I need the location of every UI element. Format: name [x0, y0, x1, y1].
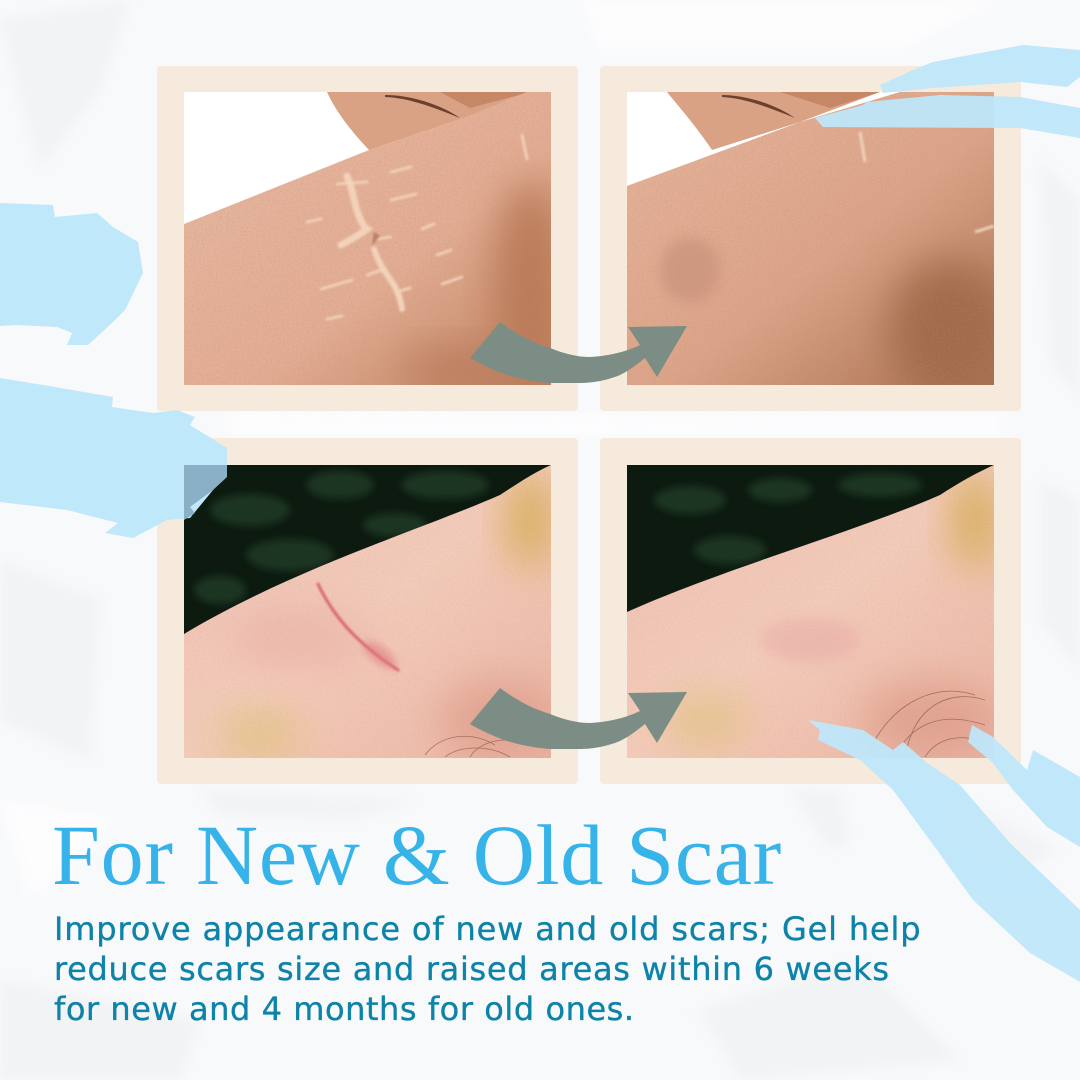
photo: old scar before [184, 92, 564, 400]
photo: new scar after [627, 465, 1000, 760]
panel: bottom right frame [600, 438, 1021, 784]
description text: for new and 4 months for old ones. [54, 990, 635, 1028]
brush overlap on photo [184, 465, 227, 520]
panel: top right frame [600, 66, 1021, 411]
arrow: top before to after [470, 322, 687, 383]
panel: top left frame [157, 66, 578, 411]
brush stroke: left lower [0, 378, 227, 538]
description text [54, 910, 921, 1028]
panel: bottom left frame [157, 438, 578, 784]
photo: new scar before [184, 465, 560, 761]
description text: Improve appearance of new and old scars; Gel help [54, 910, 921, 948]
brush stroke: left upper [0, 203, 143, 345]
photo: old scar after [627, 92, 1010, 400]
title: For New & Old Scar [52, 807, 782, 903]
arrow: bottom before to after [470, 688, 687, 749]
brush stroke: bottom right [808, 720, 1080, 982]
brush stroke: top right [815, 45, 1080, 138]
description text: reduce scars size and raised areas within 6 weeks [54, 950, 890, 988]
